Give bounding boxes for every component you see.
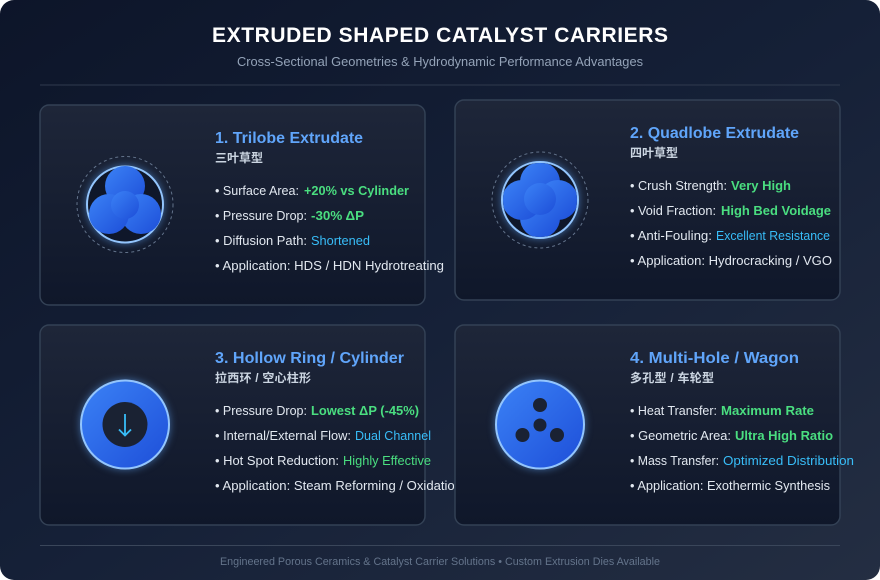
spec list: • Application: HDS / HDN Hydrotreating <box>215 258 444 273</box>
arrow: flow through bore <box>119 414 131 436</box>
spec list: Maximum Rate <box>721 403 814 418</box>
icon: quadlobe cross-section <box>492 152 588 248</box>
panel: quadlobe extrudate <box>455 100 840 300</box>
subtitle: Cross-Sectional Geometries & Hydrodynamic Performance Advantages <box>237 54 643 69</box>
footer: Engineered Porous Ceramics & Catalyst Carrier Solutions • Custom Extrusion Dies Available <box>220 556 660 568</box>
heading: quadlobe: 2. Quadlobe Extrudate <box>630 125 799 142</box>
spec list: Lowest ΔP (-45%) <box>311 403 419 418</box>
spec list: • Pressure Drop: <box>215 403 307 418</box>
panel: trilobe extrudate <box>40 105 444 305</box>
heading: hollow ring: 3. Hollow Ring / Cylinder <box>215 350 404 367</box>
spec list <box>630 178 832 268</box>
spec list: • Pressure Drop: <box>215 208 307 223</box>
icon: hollow ring cross-section <box>81 380 169 468</box>
spec list: • Heat Transfer: <box>630 403 717 418</box>
spec list: Very High <box>731 178 791 193</box>
spec list: • Diffusion Path: <box>215 233 307 248</box>
spec list: • Hot Spot Reduction: <box>215 453 339 468</box>
title: EXTRUDED SHAPED CATALYST CARRIERS <box>212 24 668 47</box>
chinese name: 拉西环 / 空心柱形 <box>215 370 311 385</box>
spec list: High Bed Voidage <box>721 203 831 218</box>
spec list: • Crush Strength: <box>630 178 727 193</box>
spec list <box>215 183 444 273</box>
chinese name: 多孔型 / 车轮型 <box>630 370 714 385</box>
spec list: • Application: Steam Reforming / Oxidation <box>215 478 462 493</box>
spec list: • Void Fraction: <box>630 203 716 218</box>
spec list: Dual Channel <box>355 428 431 443</box>
spec list: Excellent Resistance <box>716 228 830 243</box>
spec list: • Internal/External Flow: <box>215 428 351 443</box>
heading: multi-hole: 4. Multi-Hole / Wagon <box>630 350 799 367</box>
spec list <box>630 403 854 493</box>
spec list: -30% ΔP <box>311 208 364 223</box>
chinese name: 三叶草型 <box>215 150 263 165</box>
spec list: Shortened <box>311 233 370 248</box>
spec list: Highly Effective <box>343 453 431 468</box>
spec list <box>215 403 462 493</box>
spec list: • Mass Transfer: <box>630 453 719 468</box>
spec list: • Application: Exothermic Synthesis <box>630 478 830 493</box>
spec list: • Surface Area: <box>215 183 299 198</box>
chinese name: 四叶草型 <box>630 145 678 160</box>
panel: multi-hole wagon <box>455 325 854 525</box>
spec list: +20% vs Cylinder <box>304 183 409 198</box>
spec list: Ultra High Ratio <box>735 428 833 443</box>
spec list: Optimized Distribution <box>723 453 854 468</box>
icon: trilobe cross-section <box>77 156 173 252</box>
panel: hollow ring <box>40 325 462 525</box>
spec list: • Geometric Area: <box>630 428 731 443</box>
spec list: • Anti-Fouling: <box>630 228 712 243</box>
spec list: • Application: Hydrocracking / VGO <box>630 253 832 268</box>
heading: trilobe: 1. Trilobe Extrudate <box>215 130 363 147</box>
icon: multi-hole cross-section <box>496 380 584 468</box>
